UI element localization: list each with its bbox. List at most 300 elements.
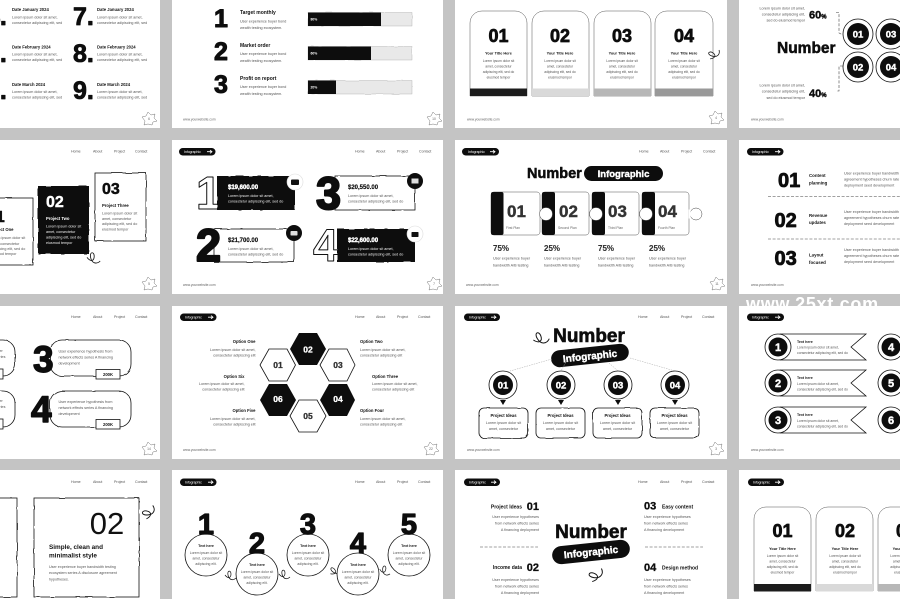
card 01 xyxy=(470,11,527,96)
bar labels: User experience buyer bond xyxy=(240,20,286,24)
nav: Project xyxy=(681,315,692,319)
hexagons: 02 xyxy=(303,344,313,354)
note 01: from network effects series xyxy=(495,522,539,526)
panel: tall cards continued xyxy=(739,470,900,599)
date text blocks: Lorem ipsum dolor sit amet, xyxy=(97,16,142,20)
panel: ribbons xyxy=(739,306,900,459)
puzzle pieces: 02 xyxy=(559,202,578,221)
heading xyxy=(550,326,630,368)
item 4: $22,600.00 xyxy=(348,238,379,244)
footer url: www.yourwebsite.com xyxy=(467,448,500,452)
pill tag xyxy=(747,314,784,321)
note 04: User experience hypotheses xyxy=(644,578,691,582)
note 01: Project Ideas xyxy=(491,504,522,510)
center title xyxy=(551,522,631,565)
40 percent block: consectetur adipiscing elit, xyxy=(762,90,805,94)
left options: consectetur adipiscing elit xyxy=(213,422,256,426)
idea boxes: amet, consectetur xyxy=(660,427,690,431)
percentages: 75% xyxy=(493,244,509,253)
card 02 xyxy=(816,507,873,592)
ribbon 3: Text here xyxy=(797,413,813,417)
note 03: A financing development xyxy=(644,528,684,532)
card 03: adipiscing elit, sed do xyxy=(606,70,638,74)
footer url: www.yourwebsite.com xyxy=(466,283,499,287)
card 01 xyxy=(754,507,811,592)
panel: money figures xyxy=(172,140,443,294)
60 percent block: sed do eiusmod tempor xyxy=(766,18,806,22)
card 04: 04 xyxy=(674,26,694,46)
left options: Lorem ipsum dolor sit amet, xyxy=(199,382,244,386)
note 04: A financing development xyxy=(644,591,684,595)
bar labels: wealth testing ecosystem. xyxy=(240,59,282,63)
card 01: adipiscing elit, sed do xyxy=(767,565,798,569)
page badge xyxy=(142,277,157,290)
date text blocks: Lorem ipsum dolor sit amet, xyxy=(12,52,58,56)
page badge: 11 xyxy=(715,282,719,286)
pin 02: 02 xyxy=(556,380,566,392)
card three: 03 xyxy=(102,181,120,198)
card 03: 03 xyxy=(612,26,632,46)
circle 4: amet, consectetur xyxy=(345,576,372,580)
card 04: Lorem ipsum dolor sit xyxy=(668,59,700,63)
footer url: www.yourwebsite.com xyxy=(183,448,216,452)
idea boxes: Lorem ipsum dolor sit xyxy=(657,421,692,425)
left options: Option Five xyxy=(232,408,256,413)
idea boxes: Project Ideas xyxy=(661,413,688,418)
row numbers: 02 xyxy=(774,210,797,232)
squiggle xyxy=(532,330,550,346)
right options: consectetur adipiscing elit xyxy=(360,354,402,358)
pill tag xyxy=(180,314,216,321)
page badge xyxy=(709,442,724,455)
ribbon 2: Text here xyxy=(797,376,813,380)
puzzle pieces: Fourth Plan xyxy=(658,226,675,230)
item 2: 2 xyxy=(196,220,221,271)
40 percent block: sed do eiusmod tempor xyxy=(766,96,806,100)
puzzle pieces: 03 xyxy=(608,202,627,221)
heading: Number xyxy=(527,166,582,182)
puzzle pieces: Third Plan xyxy=(608,226,623,230)
card 01: Your Title Here xyxy=(769,547,796,551)
hexagons: 01 xyxy=(273,360,283,370)
card 02: adipiscing elit, sed do xyxy=(829,565,861,569)
circle 3: amet, consectetur xyxy=(295,556,322,560)
item 4: 200K xyxy=(103,422,113,427)
heading: Infographic xyxy=(598,169,649,180)
date text blocks: consectetur adipiscing elit, sed xyxy=(12,58,62,62)
note 03: 03 xyxy=(644,500,656,512)
bar labels: User experience buyer bond xyxy=(240,52,286,56)
ribbon 3: Lorem ipsum dolor sit amet, xyxy=(797,419,839,423)
card 04: adipiscing elit, sed do xyxy=(668,70,700,74)
pill tag: Infographic xyxy=(184,150,201,154)
nav xyxy=(638,315,714,319)
nav: Home xyxy=(638,480,648,484)
40 percent block: 40% xyxy=(809,88,827,100)
percentages: User experience buyer xyxy=(598,256,636,260)
left options: Lorem ipsum dolor sit amet, xyxy=(210,348,256,352)
row descriptions: User experience buyer bandwidth xyxy=(844,248,899,252)
bar chart xyxy=(308,12,412,94)
right ribbon circles: 6 xyxy=(888,415,894,427)
card two: eiusmod tempor xyxy=(46,241,73,245)
card 02: minimalist style xyxy=(49,552,97,560)
card 03: amet, consectetur xyxy=(609,64,636,68)
pill tag xyxy=(180,478,216,486)
card 03 xyxy=(878,507,900,592)
date text blocks: Date February 2024 xyxy=(12,44,51,50)
pill tag: Infographic xyxy=(752,150,769,154)
ribbon 2: consectetur adipiscing elit, sed do xyxy=(797,388,848,392)
pin 04: 04 xyxy=(670,380,681,392)
bar chart: 20% xyxy=(310,86,317,90)
nav: About xyxy=(93,480,102,484)
ribbon 2 xyxy=(765,370,866,396)
page badge: 22 xyxy=(429,447,433,451)
idea boxes: Lorem ipsum dolor sit xyxy=(543,421,578,425)
pill tag: Infographic xyxy=(752,316,769,320)
item 1 xyxy=(196,167,303,219)
item 3: User experience hypothesis from xyxy=(58,350,112,354)
ribbon 1: 1 xyxy=(775,342,781,354)
rank numbers: 1 xyxy=(214,5,228,33)
card 02: Lorem ipsum dolor sit xyxy=(544,59,576,63)
note 04: Design method xyxy=(662,566,698,572)
left options: Option Six xyxy=(224,374,245,379)
row numbers: 01 xyxy=(778,170,800,192)
circle 3: Text here xyxy=(300,544,316,548)
big numbers 4 to 9: 9. xyxy=(73,77,94,105)
nav: Home xyxy=(71,480,81,484)
item 3: 3 xyxy=(33,339,54,380)
row descriptions: User experience buyer bandwidth xyxy=(844,210,899,214)
circle 1: Lorem ipsum dolor sit xyxy=(190,551,222,555)
right ribbon circles: 5 xyxy=(888,378,894,390)
note 02: A financing deployment xyxy=(501,591,539,595)
card 01: adipiscing elit, sed do xyxy=(483,70,514,74)
nav: Contact xyxy=(419,150,431,154)
card 03: Your Title Here xyxy=(609,52,635,56)
60 percent block: 60% xyxy=(809,10,827,22)
card 02: Lorem ipsum dolor sit xyxy=(829,554,861,558)
item 2: $21,700.00 xyxy=(228,238,259,244)
card one xyxy=(0,198,33,265)
note 03: Easy content xyxy=(662,504,693,510)
card 01: Your Title Here xyxy=(485,52,512,56)
footer url: www.yourwebsite.com xyxy=(467,118,500,122)
card 04: Your Title Here xyxy=(671,52,697,56)
item 3: 200K xyxy=(103,372,113,377)
left options: Lorem ipsum dolor sit amet, xyxy=(210,417,256,421)
date text blocks: Lorem ipsum dolor sit amet, xyxy=(12,90,58,94)
card 02: Simple, clean and xyxy=(49,544,103,551)
hexagons: 05 xyxy=(303,411,313,421)
nav: Contact xyxy=(703,150,715,154)
nav: Contact xyxy=(135,315,147,319)
bar labels: User experience buyer bond xyxy=(240,85,286,89)
nav xyxy=(71,150,147,154)
circle 3 xyxy=(287,509,329,576)
percentages: 75% xyxy=(598,244,614,253)
footer url: www.yourwebsite.com xyxy=(183,283,216,287)
item 3: Lorem ipsum dolor sit amet, xyxy=(348,194,394,198)
panel: hierarchy with pins xyxy=(455,306,727,459)
page badge: 5 xyxy=(148,282,150,286)
nav: Project xyxy=(114,150,125,154)
item 1: $19,600.00 xyxy=(228,185,259,191)
circle 5 xyxy=(388,509,430,576)
item 4 xyxy=(313,220,423,271)
nav: About xyxy=(376,480,385,484)
item 2 xyxy=(196,220,302,271)
center title: Number xyxy=(777,40,836,57)
nav: About xyxy=(93,315,102,319)
panel: central title with four notes xyxy=(455,470,727,599)
circle 1: amet, consectetur xyxy=(193,556,220,560)
bar labels xyxy=(240,10,286,96)
nav: Contact xyxy=(702,480,714,484)
nav: Project xyxy=(397,315,408,319)
right ribbon circles xyxy=(878,334,900,433)
nav: Contact xyxy=(135,150,147,154)
circle 5: amet, consectetur xyxy=(396,556,423,560)
percentages: 25% xyxy=(544,244,560,253)
nav: Project xyxy=(397,480,408,484)
card three: Project Three xyxy=(102,203,129,208)
rank numbers xyxy=(214,5,228,99)
date text blocks xyxy=(12,7,147,100)
nav: Home xyxy=(355,315,365,319)
nav: Home xyxy=(355,150,365,154)
card 02 xyxy=(34,498,139,597)
40 percent block: Lorem ipsum dolor sit amet, xyxy=(760,84,805,88)
nav: Home xyxy=(71,315,81,319)
pin 03: 03 xyxy=(613,380,623,392)
card 02: hypotheses. xyxy=(49,578,69,582)
panel: number percentages xyxy=(739,0,900,128)
rank numbers: 2 xyxy=(214,38,228,66)
circle 5: adipiscing elit. xyxy=(398,562,420,566)
pill tag: Infographic xyxy=(753,480,770,484)
numbered circles: 01 xyxy=(853,30,864,40)
row descriptions: deployment seed development xyxy=(844,222,894,226)
page badge xyxy=(424,442,439,455)
nav: Contact xyxy=(135,480,147,484)
idea boxes: Project Ideas xyxy=(547,413,574,418)
page badge: 3 xyxy=(715,447,717,451)
squiggles xyxy=(225,564,391,580)
pill tag: Infographic xyxy=(185,316,202,320)
nav xyxy=(639,150,715,154)
item 3 xyxy=(33,339,131,380)
date text blocks: Date February 2024 xyxy=(97,44,136,50)
bar labels: wealth testing ecosystem. xyxy=(240,92,282,96)
card three xyxy=(95,173,146,241)
card 02: Your Title Here xyxy=(832,547,858,551)
item 3: $20,550.00 xyxy=(348,185,379,191)
date text blocks: Date March 2024 xyxy=(12,82,46,87)
circle 4 xyxy=(337,528,379,595)
nav xyxy=(355,480,430,484)
right options: Lorem ipsum dolor sit amet, xyxy=(360,348,406,352)
nav: Home xyxy=(639,150,649,154)
circle 5: 5 xyxy=(401,509,417,541)
heading: Infographic xyxy=(562,349,618,365)
card 01: 01 xyxy=(772,521,793,541)
page badge: 10 xyxy=(432,117,436,121)
card 01: Lorem ipsum dolor sit xyxy=(483,59,514,63)
panel: progress bars xyxy=(172,0,443,128)
right options: Lorem ipsum dolor sit amet, xyxy=(372,382,418,386)
squiggle xyxy=(141,504,155,520)
nav: Project xyxy=(114,480,125,484)
ribbon 2: 2 xyxy=(775,378,781,390)
card 02: amet, consectetur xyxy=(547,64,574,68)
row labels: planning xyxy=(809,180,828,186)
ribbon 1 xyxy=(765,334,866,360)
card three: Lorem ipsum dolor sit xyxy=(102,212,137,216)
pill tag: Infographic xyxy=(185,480,202,484)
rank numbers: 3 xyxy=(214,71,228,99)
nav: Project xyxy=(681,480,692,484)
percentages: User experience buyer xyxy=(493,256,531,260)
pill tag xyxy=(747,148,784,156)
pin 01 xyxy=(489,371,517,405)
idea boxes: Project Ideas xyxy=(490,413,517,418)
puzzle pieces: Second Plan xyxy=(558,226,577,230)
ribbon 3: 3 xyxy=(775,415,781,427)
connectors xyxy=(503,358,675,373)
puzzle pieces: First Plan xyxy=(506,226,520,230)
panel: five circles xyxy=(172,470,443,599)
page badge xyxy=(709,111,724,124)
card 04 xyxy=(655,11,713,96)
circle 1: adipiscing elit. xyxy=(195,562,217,566)
panel: rounded hand-drawn items xyxy=(0,306,160,459)
card 02: User experience buyer bandwidth testing xyxy=(49,565,116,569)
card 03: Lorem ipsum dolor sit xyxy=(606,59,638,63)
circle 3: adipiscing elit. xyxy=(297,562,319,566)
ribbon 1: Lorem ipsum dolor sit amet, xyxy=(797,346,839,350)
bar labels: Target monthly xyxy=(240,10,276,16)
item 4: 4 xyxy=(313,220,338,271)
footer url: www.yourwebsite.com xyxy=(183,118,216,122)
circle 1: 1 xyxy=(198,509,214,541)
hexagons: 04 xyxy=(333,394,343,404)
nav: Contact xyxy=(702,315,714,319)
row descriptions: agreement hypotheses churn rate xyxy=(844,216,899,220)
note 02 xyxy=(492,562,539,595)
item 4: consectetur adipiscing elit, sed do xyxy=(348,252,403,256)
footer url: www.yourwebsite.com xyxy=(751,118,784,122)
numbered circles: 03 xyxy=(886,30,896,40)
item 2: consectetur adipiscing elit, sed do xyxy=(228,252,283,256)
date text blocks: consectetur adipiscing elit, sed xyxy=(97,96,147,100)
squiggle xyxy=(706,46,721,61)
page badge xyxy=(427,277,442,290)
card 03: eiusmod tempor xyxy=(610,76,635,80)
note 03 xyxy=(644,500,693,532)
card 02: eiusmod tempor xyxy=(833,570,858,574)
percentages: bandwidth A/B testing xyxy=(493,264,528,268)
ribbon 3: consectetur adipiscing elit, sed do xyxy=(797,424,848,428)
nav xyxy=(638,480,714,484)
date text blocks: consectetur adipiscing elit, sed xyxy=(97,58,147,62)
note 02: 02 xyxy=(527,562,539,574)
card 01: eiusmod tempor xyxy=(487,76,511,80)
panel: puzzle infographic xyxy=(455,140,727,294)
60 percent block: Lorem ipsum dolor sit amet, xyxy=(760,6,805,10)
numbered circles: 04 xyxy=(886,62,897,74)
pill tag xyxy=(462,148,499,156)
left options xyxy=(199,339,256,426)
card 02: amet, consectetur xyxy=(832,560,859,564)
item 4: development xyxy=(58,412,80,416)
connectors xyxy=(836,12,843,91)
pill tag xyxy=(464,314,500,321)
right options: Lorem ipsum dolor sit amet, xyxy=(360,417,406,421)
nav: Contact xyxy=(418,480,430,484)
date text blocks: consectetur adipiscing elit, sed xyxy=(97,21,147,25)
pill tag: Infographic xyxy=(469,480,486,484)
note 01: 01 xyxy=(527,501,539,513)
ribbon 1: consectetur adipiscing elit, sed do xyxy=(797,351,848,355)
row labels: focused xyxy=(809,260,826,265)
squiggle xyxy=(87,253,100,263)
row numbers xyxy=(774,170,800,270)
page badge: 14 xyxy=(147,447,151,451)
item 3: development xyxy=(58,362,80,366)
date text blocks: Date January 2024 xyxy=(12,7,49,12)
nav: About xyxy=(376,315,385,319)
page badge: 7 xyxy=(433,282,435,286)
nav: Home xyxy=(355,480,365,484)
right options: Option Four xyxy=(360,408,384,413)
date text blocks: consectetur adipiscing elit, sed xyxy=(12,96,62,100)
center title: Infographic xyxy=(563,545,619,561)
left options: consectetur adipiscing elit xyxy=(213,354,256,358)
item 4: 4 xyxy=(31,389,52,430)
item 1: Lorem ipsum dolor sit amet, xyxy=(228,194,274,198)
footer url: www.yourwebsite.com xyxy=(751,283,784,287)
circle 1 xyxy=(185,509,227,576)
page badge xyxy=(710,277,725,290)
idea boxes: amet, consectetur xyxy=(603,427,633,431)
heading: Number xyxy=(553,326,625,347)
center title: Number xyxy=(555,522,627,543)
bar labels: Profit on report xyxy=(240,76,277,82)
circle 2 xyxy=(236,528,278,595)
date text blocks: consectetur adipiscing elit, sed xyxy=(12,21,62,25)
percentages: User experience buyer xyxy=(544,256,582,260)
card 01: Lorem ipsum dolor sit xyxy=(767,554,798,558)
date text blocks: Lorem ipsum dolor sit amet, xyxy=(97,90,142,94)
nav: About xyxy=(660,315,669,319)
left options: consectetur adipiscing elit xyxy=(202,388,244,392)
row labels: Content xyxy=(809,173,826,178)
row labels: Layout xyxy=(809,252,824,258)
nav: About xyxy=(376,150,385,154)
card 02: eiusmod tempor xyxy=(548,76,573,80)
pin 04 xyxy=(661,371,689,405)
heading xyxy=(527,166,663,182)
pin 01: 01 xyxy=(498,380,509,392)
item 4: User experience hypothesis from xyxy=(58,400,112,404)
page badge xyxy=(427,112,442,125)
idea boxes: Lorem ipsum dolor sit xyxy=(486,421,521,425)
percentages: bandwidth A/B testing xyxy=(544,264,579,268)
circle 5: Text here xyxy=(401,544,417,548)
